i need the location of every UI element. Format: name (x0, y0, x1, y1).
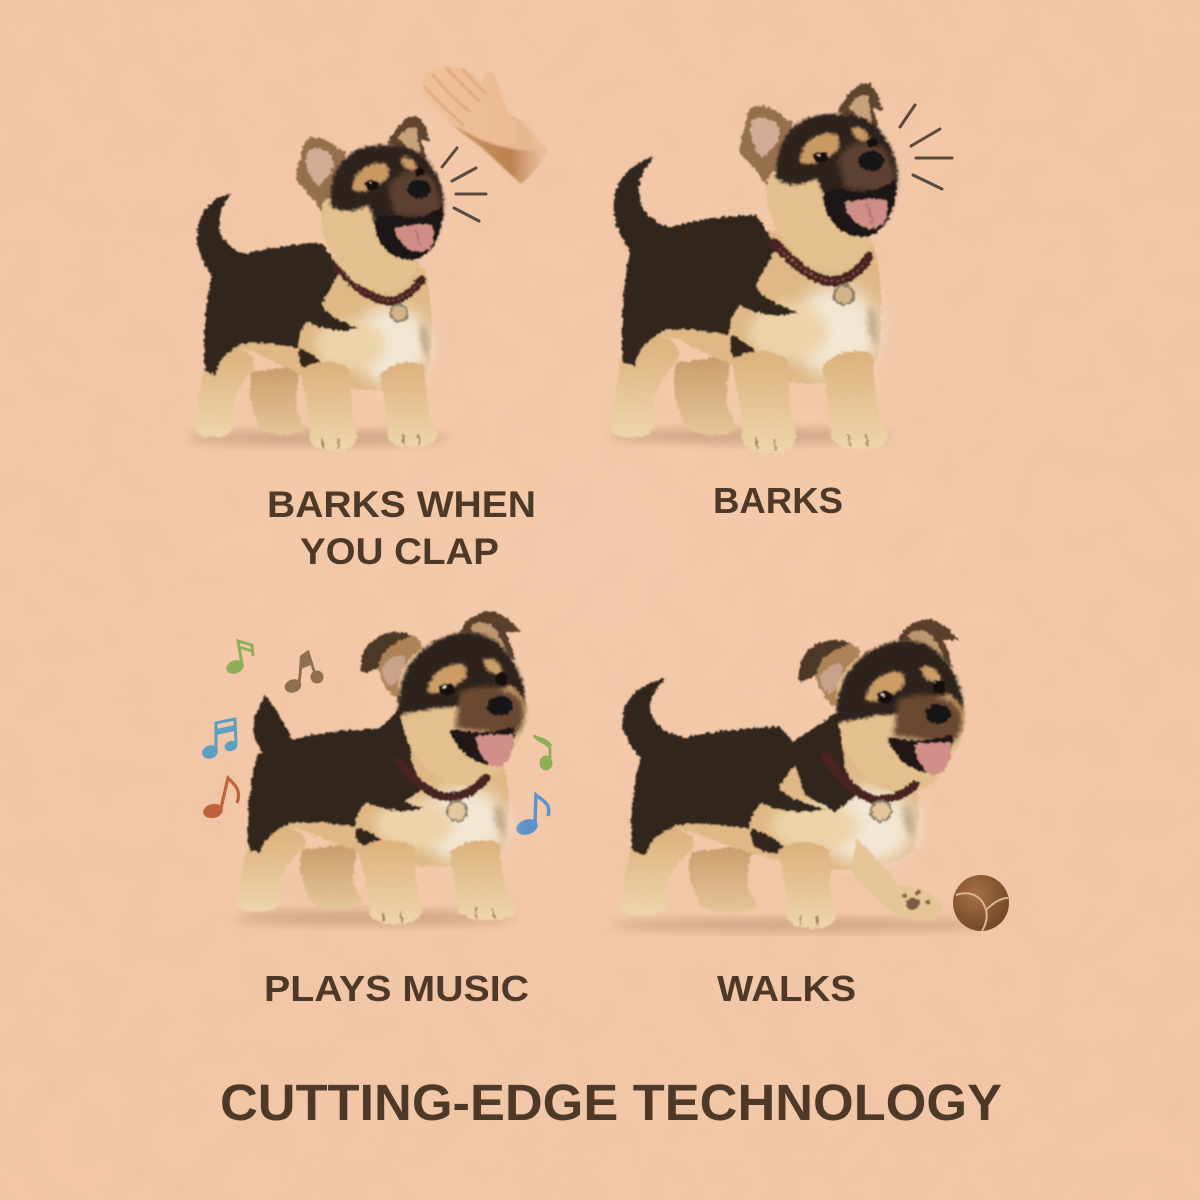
icon: brown note (283, 652, 324, 695)
puppy: walking (620, 620, 965, 928)
icon: bark sound lines (900, 105, 952, 189)
shadow (186, 430, 450, 446)
label: walks: WALKS (717, 968, 856, 1009)
label: barks when you clap: BARKS WHEN (267, 484, 536, 525)
panel: barks when you clap (186, 66, 550, 572)
label: barks when you clap: YOU CLAP (300, 531, 499, 572)
icon: right blue note (514, 795, 549, 838)
icon: clapping hands (421, 66, 550, 184)
icon: ball (953, 875, 1009, 931)
puppy: dancing to music (237, 612, 527, 924)
puppy: looking up (195, 116, 444, 451)
shadow (235, 910, 515, 926)
shadow (608, 428, 892, 444)
icon: red-orange note (202, 778, 239, 820)
puppy: barking (611, 83, 897, 453)
icon: blue beamed note (200, 719, 239, 761)
title: CUTTING-EDGE TECHNOLOGY (220, 1074, 1002, 1131)
label: plays music: PLAYS MUSIC (264, 968, 529, 1009)
panel: barks (608, 83, 952, 521)
icon: right green note (534, 735, 552, 770)
panel: plays music (200, 612, 552, 1009)
panel: walks (610, 620, 1009, 1009)
label: barks when you clap (267, 484, 536, 572)
icon: clap sound lines (442, 148, 486, 221)
label: barks: BARKS (713, 480, 843, 521)
shadow (610, 918, 990, 932)
icon: green double-flag note (224, 641, 253, 676)
